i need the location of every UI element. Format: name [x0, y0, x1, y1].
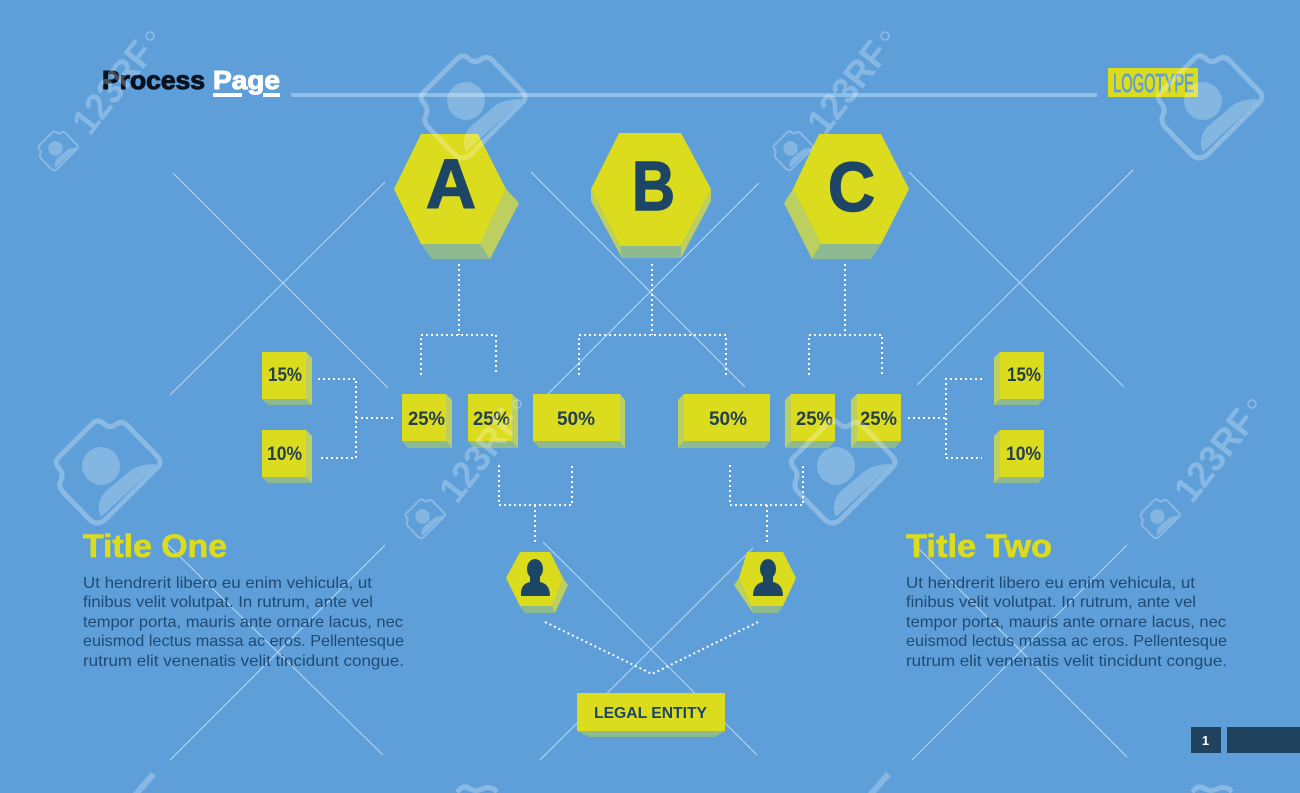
header rule	[291, 93, 1097, 97]
watermark logo one: 123RF	[64, 33, 162, 142]
icon: left person hexagon	[506, 552, 568, 613]
title: Process	[102, 65, 205, 95]
watermark cropped logo marks	[133, 772, 891, 793]
box: right 25% second: 25%	[860, 409, 897, 430]
watermark logo three	[405, 400, 529, 538]
hexagon C: C	[828, 148, 875, 226]
logotype	[1108, 68, 1198, 98]
box: left 25% first	[402, 394, 452, 448]
box: left 15%: 15%	[268, 365, 302, 386]
box: right 15%: 15%	[1007, 365, 1041, 386]
box: right 50%	[678, 394, 770, 448]
watermark logo four: 123RF	[1166, 401, 1264, 510]
watermark logo two: 123RF	[799, 33, 897, 142]
text block: title one	[83, 528, 404, 670]
hexagon C	[784, 134, 909, 259]
text block: title two: euismod lectus massa ac eros. Pellentesque	[906, 633, 1227, 650]
text block: title two	[906, 528, 1227, 670]
hexagon B: B	[632, 147, 675, 225]
box: left 50%: 50%	[557, 409, 595, 430]
box: left 25% first: 25%	[408, 409, 445, 430]
watermark logo two	[773, 32, 897, 170]
hexagon A: A	[426, 145, 476, 223]
watermark logo four	[1140, 400, 1264, 538]
text block: title two: tempor porta, mauris ante ornare lacus, nec	[906, 614, 1226, 631]
box: right 25% first	[785, 394, 835, 448]
dotted connectors	[318, 264, 982, 674]
box: right 15%	[994, 352, 1044, 405]
watermark logo three: 123RF	[431, 401, 529, 510]
box: left 25% second: 25%	[473, 409, 510, 430]
text block: title two: finibus velit volutpat. In rutrum, ante vel	[906, 594, 1196, 611]
hexagon A	[394, 134, 519, 259]
legal entity box	[577, 693, 725, 737]
box: right 25% second	[851, 394, 901, 448]
text block: title one: finibus velit volutpat. In rutrum, ante vel	[83, 594, 373, 611]
text block: title one: rutrum elit venenatis velit tincidunt congue.	[83, 653, 404, 670]
box: right 10%: 10%	[1006, 444, 1041, 465]
box: right 50%: 50%	[709, 409, 747, 430]
page number	[1191, 727, 1300, 753]
text block: title two: Ut hendrerit libero eu enim vehicula, ut	[906, 575, 1196, 592]
text block: title one: Title One	[83, 528, 227, 564]
page number: 1	[1202, 733, 1209, 748]
text block: title one: Ut hendrerit libero eu enim vehicula, ut	[83, 575, 373, 592]
text block: title one: tempor porta, mauris ante ornare lacus, nec	[83, 614, 403, 631]
hexagon B	[591, 133, 711, 258]
box: right 10%	[994, 430, 1044, 483]
box: left 50%	[533, 394, 625, 448]
title	[102, 65, 280, 97]
legal entity box: LEGAL ENTITY	[594, 705, 707, 722]
text block: title one: euismod lectus massa ac eros. Pellentesque	[83, 633, 404, 650]
watermark eggs	[56, 56, 1262, 523]
box: right 25% first: 25%	[796, 409, 833, 430]
box: left 15%	[262, 352, 312, 405]
box: left 25% second	[468, 394, 518, 448]
icon: right person hexagon	[734, 552, 796, 613]
title: Page	[213, 65, 280, 95]
logotype: LOGOTYPE	[1113, 68, 1194, 98]
box: left 10%	[262, 430, 312, 483]
watermark cropped egg tops	[457, 787, 1232, 792]
text block: title two: Title Two	[906, 528, 1052, 564]
watermark logo one	[38, 32, 162, 170]
text block: title two: rutrum elit venenatis velit tincidunt congue.	[906, 653, 1227, 670]
box: left 10%: 10%	[267, 444, 302, 465]
